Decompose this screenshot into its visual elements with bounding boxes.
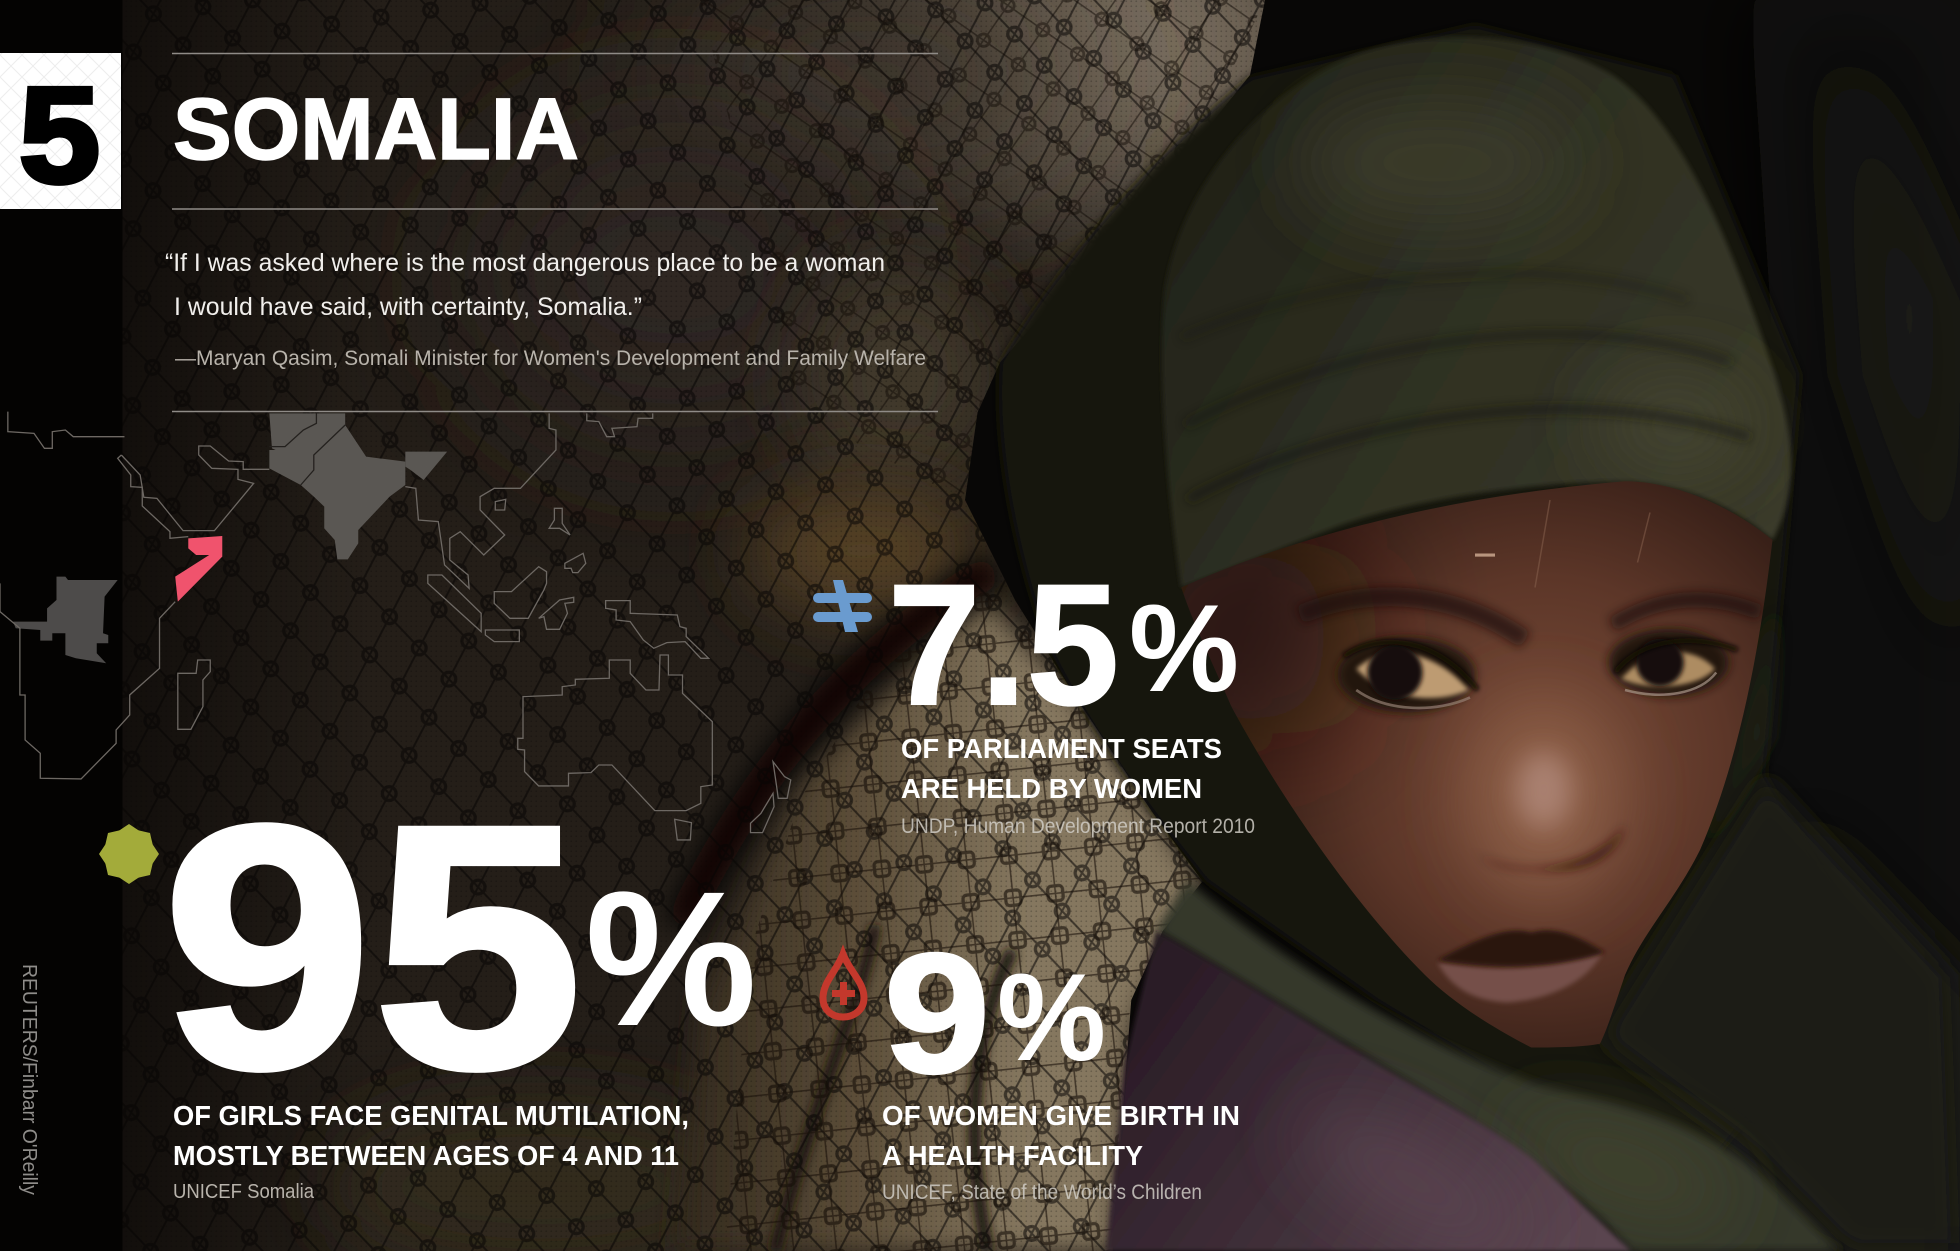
icon: blood drop with cross — [823, 954, 864, 1017]
map: coastlines — [0, 412, 791, 840]
icon: blue parliament symbol — [813, 580, 872, 632]
rank badge: 5 — [19, 59, 100, 211]
quote: “If I was asked where is the most dangerous place to be a woman — [165, 249, 885, 277]
title: SOMALIA — [173, 81, 579, 178]
map: filled neighbouring countries — [13, 413, 447, 663]
dark garment at right — [1500, 0, 1960, 1251]
stat: 7.5 percent: % — [1129, 580, 1239, 718]
stat: 95 percent: MOSTLY BETWEEN AGES OF 4 AND 11 — [173, 1140, 679, 1171]
stat: 9 percent: % — [997, 949, 1106, 1087]
eyes — [1338, 629, 1738, 712]
patterned fabric — [112, 0, 1338, 1251]
stat: 9 percent: A HEALTH FACILITY — [882, 1140, 1143, 1171]
stat: 7.5 percent: 7.5 — [888, 549, 1119, 741]
stat: 95 percent: OF GIRLS FACE GENITAL MUTILATION, — [173, 1100, 689, 1131]
head wrap — [1162, 37, 1791, 587]
icon: green badge — [99, 824, 159, 884]
left dark strip — [0, 0, 372, 1251]
stat: 9 percent: OF WOMEN GIVE BIRTH IN — [882, 1100, 1240, 1131]
stat: 95 percent: 95 — [162, 753, 583, 1141]
stat: 95 percent: UNICEF Somalia — [173, 1180, 315, 1203]
photo credit: REUTERS/Finbarr O'Reilly — [18, 964, 40, 1195]
quote attribution: —Maryan Qasim, Somali Minister for Women's Development and Family Welfare — [175, 346, 926, 370]
hood — [999, 25, 1960, 1251]
stat: 9 percent: 9 — [884, 919, 990, 1109]
quote — [165, 249, 885, 321]
world map — [0, 412, 791, 840]
map: highlighted Somalia — [175, 536, 222, 602]
purple garment — [1106, 931, 1631, 1251]
stat: 95 percent — [162, 753, 757, 1203]
stat: 9 percent — [882, 919, 1240, 1204]
stat: 7.5 percent: ARE HELD BY WOMEN — [901, 773, 1202, 804]
stat: 7.5 percent: OF PARLIAMENT SEATS — [901, 733, 1222, 764]
stat: 7.5 percent — [888, 549, 1255, 838]
nose and mouth — [1438, 825, 1625, 1002]
stat: 7.5 percent: UNDP, Human Development Report 2010 — [901, 815, 1255, 838]
stat: 9 percent: UNICEF, State of the World’s Children — [882, 1181, 1202, 1204]
face — [1162, 481, 1772, 1048]
rank badge — [0, 53, 121, 211]
stat: 95 percent: % — [585, 851, 757, 1066]
quote: I would have said, with certainty, Somalia.” — [174, 293, 642, 321]
